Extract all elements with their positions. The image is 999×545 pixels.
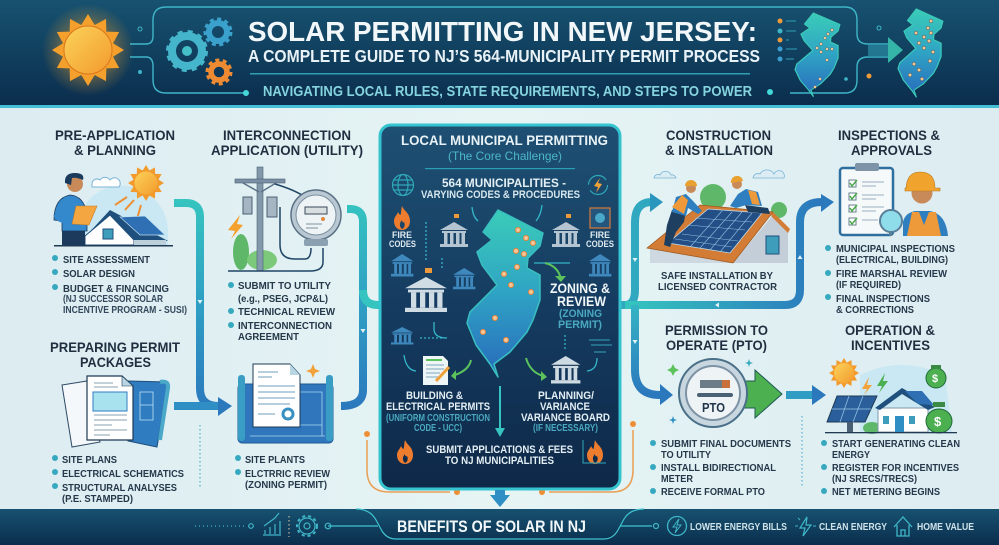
panel heading: LOCAL MUNICIPAL PERMITTING [401,132,608,148]
zoning and review: REVIEW [557,293,607,309]
caption [658,271,778,293]
planning and variance board: PLANNING/ [538,390,594,402]
bullet list: SUBMIT FINAL DOCUMENTS [661,439,791,450]
icon: NJ map right [898,9,943,97]
panel heading [401,132,608,201]
submit applications: SUBMIT APPLICATIONS & FEES [426,444,573,456]
heading: APPLICATION (UTILITY) [211,142,363,158]
orange decorative connectors [364,421,636,495]
panel: preparing permit packages [50,339,184,505]
heading: & PLANNING [74,142,156,158]
heading: INCENTIVES [851,337,930,353]
panel heading: 564 MUNICIPALITIES - [442,178,566,190]
heading: INTERCONNECTION [223,127,351,143]
bullet list: MUNICIPAL INSPECTIONS [836,244,955,255]
panel: interconnection application [211,127,363,343]
small arrows toward the map [404,205,612,371]
header connector dots [138,18,881,96]
bullet list: (e.g., PSEG, JCP&L) [238,294,328,305]
bullet list: SITE ASSESSMENT [63,255,151,266]
icon: planning board building [551,356,580,384]
planning and variance board: (IF NECESSARY) [533,423,598,434]
bullet list: INCENTIVE PROGRAM - SUSI) [63,305,187,316]
planning and variance board [521,390,610,434]
bullet list: (ZONING PERMIT) [245,480,327,491]
bullet list [821,439,960,498]
caption: SAFE INSTALLATION BY [661,271,773,282]
caption: LICENSED CONTRACTOR [658,282,778,293]
benefit: lower energy bills [654,516,787,536]
arrow: to construction and installation [615,193,663,305]
heading: PREPARING PERMIT [50,339,180,355]
flow arrows [174,193,834,416]
tagline: NAVIGATING LOCAL RULES, STATE REQUIREMENTS, AND STEPS TO POWER [263,83,752,100]
bullet list [52,455,184,505]
heading [845,322,935,353]
building and electrical permits [386,390,490,434]
bullet list: (ELECTRICAL, BUILDING) [836,255,948,266]
fire codes right [586,208,614,250]
heading [50,339,180,370]
bullet list: SUBMIT TO UTILITY [238,281,331,292]
icon: PTO meter with arrow: PTO [702,401,725,415]
icon: permit documents [62,376,168,447]
icon: gears [168,19,231,84]
fire codes right: FIRE [590,230,610,241]
arrow: down to submission [495,386,505,437]
subtitle: A COMPLETE GUIDE TO NJ’S 564-MUNICIPALITY PERMIT PROCESS [248,46,760,66]
bullet list: RECEIVE FORMAL PTO [661,487,765,498]
building and electrical permits: ELECTRICAL PERMITS [386,401,490,413]
header decorative divider [250,73,750,74]
footer left icons [195,513,331,537]
main town hall icon [405,268,447,312]
submit applications [426,444,573,467]
icon: globe [392,174,414,196]
arrow: planning to permit packages [174,203,232,416]
bullet list: ELECTRICAL SCHEMATICS [62,469,184,480]
zoning and review: PERMIT) [558,319,602,331]
zoning and review: ZONING & [550,280,610,296]
bullet list: FINAL INSPECTIONS [836,294,930,305]
benefit: clean energy: CLEAN ENERGY [819,522,887,533]
icon: person with sun and house [54,165,173,246]
bullet list: STRUCTURAL ANALYSES [62,483,177,494]
bullet list: ENERGY [832,450,870,461]
panel: permission to operate [650,322,791,498]
fire codes left: CODES [389,239,416,250]
fire codes left: FIRE [392,230,412,241]
bullet list: INSTALL BIDIRECTIONAL [661,463,776,474]
green arrows [451,263,566,381]
bullet list: & CORRECTIONS [836,305,914,316]
bullet list: TECHNICAL REVIEW [238,307,335,318]
heading [838,127,940,158]
heading: APPROVALS [851,142,932,158]
header banner [0,0,999,108]
icon: sun [42,4,134,96]
building and electrical permits: BUILDING & [406,390,463,402]
bullet list: NET METERING BEGINS [832,487,940,498]
heading: INSPECTIONS & [838,127,940,143]
bullet list: METER [661,474,694,485]
bullet list: FIRE MARSHAL REVIEW [836,269,947,280]
icon: workers installing solar panels [647,170,790,263]
building and electrical permits: (UNIFORM CONSTRUCTION [386,413,490,424]
bullet list: REGISTER FOR INCENTIVES [832,463,959,474]
panel heading: VARYING CODES & PROCEDURES [421,189,580,201]
dotted separators [200,416,802,488]
heading [665,322,768,353]
bullet list [228,281,335,343]
panel: site plants and electric review [235,364,333,491]
bullet list: BUDGET & FINANCING [63,284,169,295]
benefit: home value [894,517,974,536]
bullet list: TO UTILITY [661,450,711,461]
bullet list: SOLAR DESIGN [63,269,135,280]
arrow: utility application to local permitting [341,209,399,406]
bullet list: ELCTRRIC REVIEW [245,469,330,480]
benefit: lower energy bills: LOWER ENERGY BILLS [690,522,787,533]
map of New Jersey [467,210,543,377]
heading: PRE-APPLICATION [55,127,175,143]
bullet list: SITE PLANTS [245,455,305,466]
arrow: to inspections [625,194,834,308]
bullet list: (IF REQUIRED) [836,280,901,291]
benefit: clean energy [795,517,887,536]
bullet list: START GENERATING CLEAN [832,439,960,450]
arrow: panel down to benefits [490,490,510,507]
panel: operation and incentives [821,322,960,498]
bullet list: (NJ SRECS/TRECS) [832,474,917,485]
header arrow [868,37,903,63]
icon: bolt badge [588,176,608,194]
fire codes left [389,206,416,250]
heading [665,127,773,158]
icon: solar home with incentives: $ [932,373,938,385]
heading: OPERATION & [845,322,935,338]
heading [55,127,175,158]
icon: solar home with incentives: $ [934,414,942,429]
fire codes right: CODES [586,239,614,250]
title: SOLAR PERMITTING IN NEW JERSEY: [248,16,757,47]
zoning and review: (ZONING [559,308,602,320]
icon: permit form [423,356,449,385]
icon: PTO meter with arrow [667,359,782,427]
footer band: benefits of solar [0,509,999,545]
benefit: home value: HOME VALUE [917,522,974,533]
icon: solar home with incentives [825,358,957,434]
footer heading: BENEFITS OF SOLAR IN NJ [397,517,586,536]
submit applications: TO NJ MUNICIPALITIES [445,455,554,467]
bullet list [650,439,791,498]
icon: flames [397,440,606,464]
bullet list: INTERCONNECTION [238,321,332,332]
panel: inspections and approvals [825,127,955,316]
bullet list: SITE PLANS [62,455,117,466]
panel: pre-application and planning [52,127,187,316]
arrow: to permission to operate [632,305,673,405]
municipal building icons [391,214,611,344]
bullet list: AGREEMENT [238,332,300,343]
bullet list: (P.E. STAMPED) [62,494,133,505]
icon: site plan blueprint [238,364,333,443]
zoning and review [550,280,610,331]
planning and variance board: VARIANCE BOARD [521,412,610,424]
icon: NJ map left [795,13,840,96]
bullet list [235,455,330,491]
arrow: PTO to operation [786,385,826,405]
heading [211,127,363,158]
heading: OPERATE (PTO) [666,337,767,353]
bullet list: (NJ SUCCESSOR SOLAR [63,294,163,305]
bullet list [825,244,955,316]
heading: PERMISSION TO [665,322,768,338]
icon: utility pole and meter [228,167,341,271]
icon: worker with checklist [840,163,948,236]
heading: CONSTRUCTION [666,127,771,143]
planning and variance board: VARIANCE [540,401,590,413]
panel: local municipal permitting [380,125,620,489]
heading: PACKAGES [80,354,151,370]
building and electrical permits: CODE - UCC) [414,423,462,434]
bullet list [52,255,187,316]
heading: & INSTALLATION [665,142,773,158]
panel: construction and installation [647,127,790,293]
panel heading: (The Core Challenge) [448,149,562,163]
